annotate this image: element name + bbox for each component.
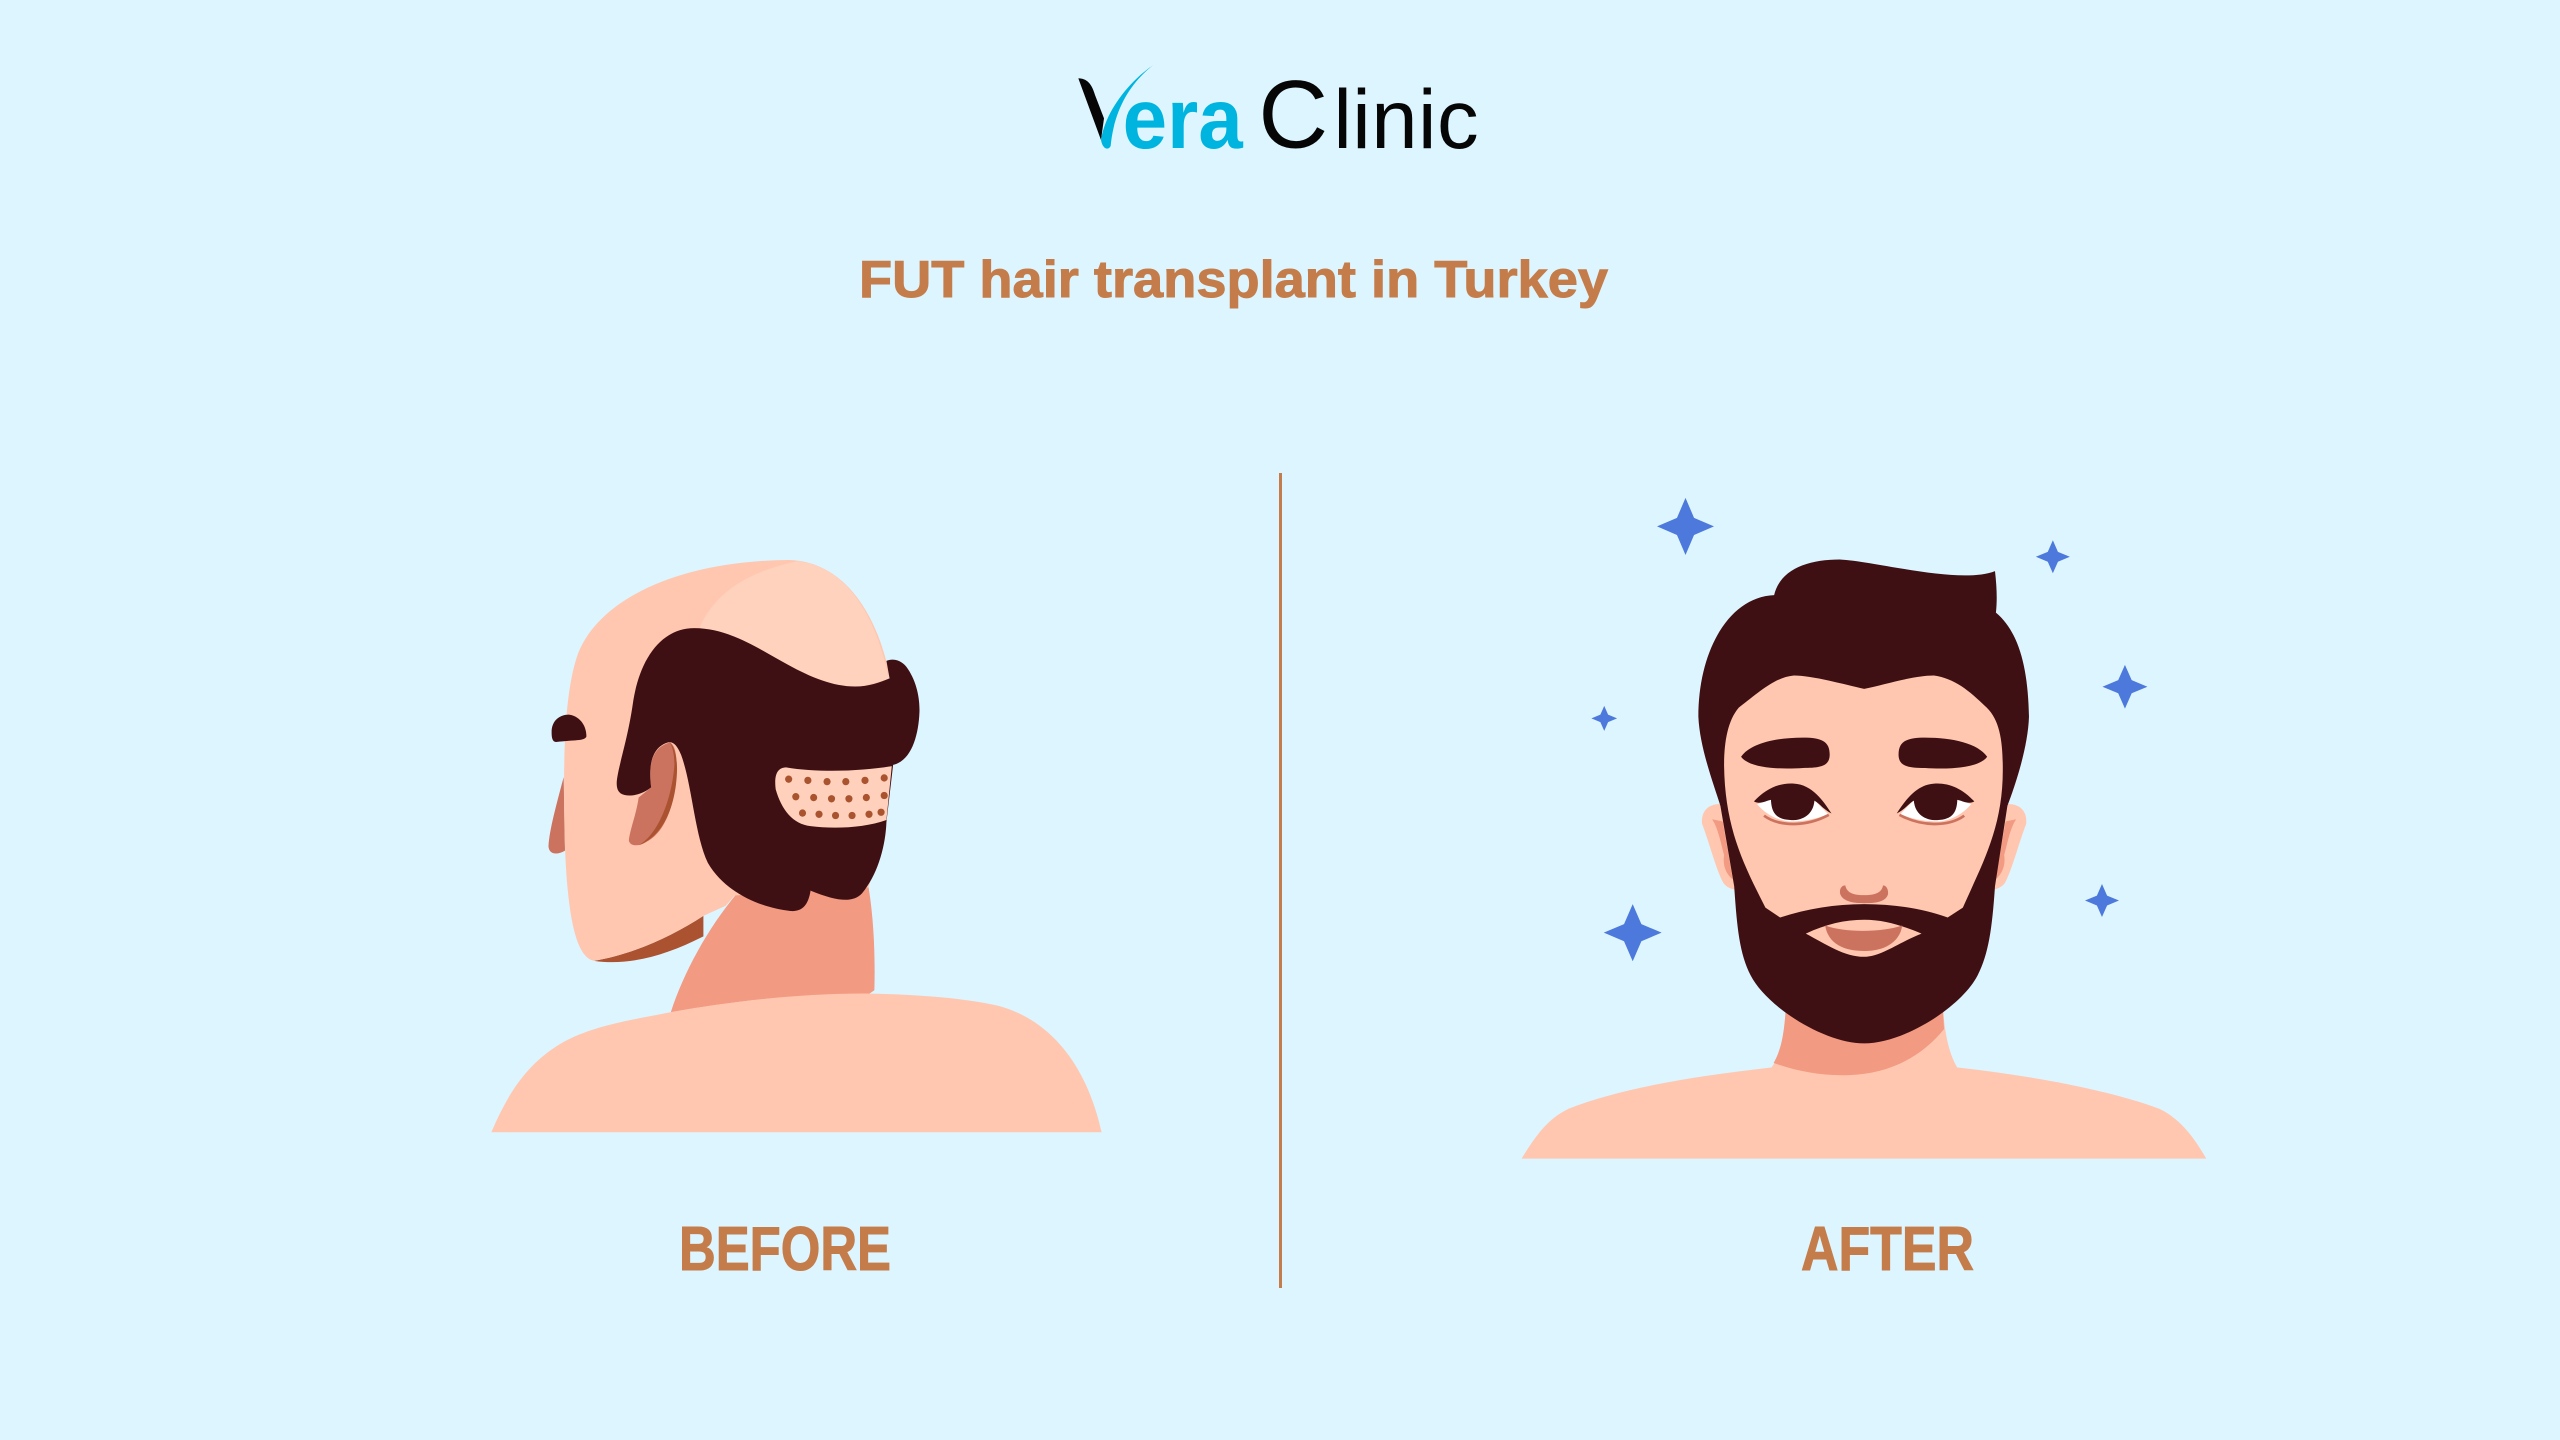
logo: Vera Clinic: C <box>1258 60 1328 168</box>
left ear <box>1702 804 1735 890</box>
left eyebrow <box>1741 738 1830 769</box>
logo: Vera Clinic <box>1078 60 1479 168</box>
after illustration: front view with full hair and beard <box>1522 498 2206 1159</box>
shoulders <box>491 993 1102 1132</box>
neck <box>671 887 875 1012</box>
right eyebrow <box>1899 738 1987 769</box>
ear <box>629 742 677 845</box>
neck <box>1771 1011 1958 1075</box>
right eye <box>1897 783 1974 824</box>
label: after: AFTER <box>1801 1215 1974 1284</box>
hair <box>617 628 919 911</box>
mouth <box>1806 920 1922 957</box>
sparkles <box>1591 498 2147 961</box>
right ear <box>1993 804 2026 890</box>
nose <box>548 777 565 854</box>
nose <box>1840 885 1888 903</box>
logo: Vera Clinic: era <box>1123 72 1243 167</box>
shoulders <box>1522 1068 2206 1159</box>
divider <box>1279 473 1282 1288</box>
hair and beard <box>1698 559 2029 1043</box>
donor strip with follicle dots <box>775 766 892 828</box>
label: before: BEFORE <box>679 1215 891 1284</box>
logo: Vera Clinic: linic <box>1333 73 1479 166</box>
before illustration: balding head from behind <box>491 560 1102 1132</box>
title: FUT hair transplant in Turkey <box>859 251 1608 309</box>
jaw shadow <box>594 916 703 962</box>
crown highlight <box>700 561 889 691</box>
face <box>1724 676 2003 918</box>
left eye <box>1754 783 1832 824</box>
eyebrow <box>552 715 586 742</box>
head <box>564 560 892 961</box>
